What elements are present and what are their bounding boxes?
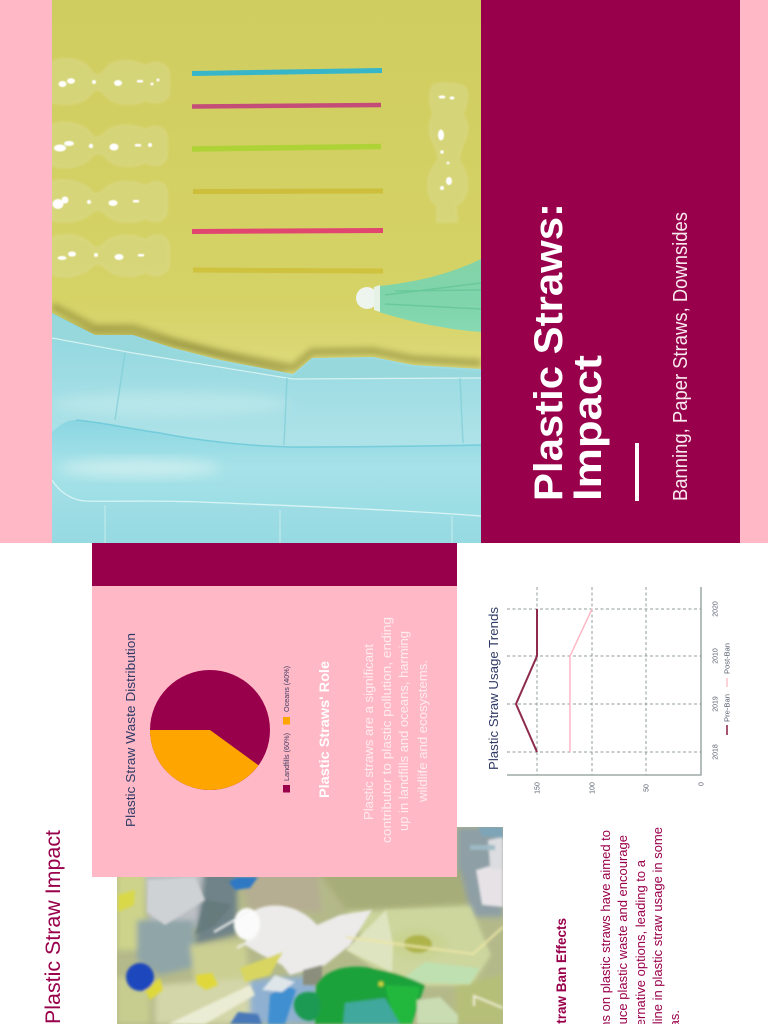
section body text: Plastic straws are a significant: [362, 643, 376, 820]
pie chart title: Plastic Straw Waste Distribution: [123, 633, 138, 827]
straws: [192, 70, 383, 271]
bottles row: [52, 59, 467, 277]
subtitle: Banning, Paper Straws, Downsides: [670, 212, 692, 501]
line chart: plastic straw usage trends: [487, 587, 732, 794]
chart title: Plastic Straw Usage Trends: [487, 607, 501, 770]
section body text: straw ban effects: [598, 827, 682, 1024]
heading: Plastic Straws:: [527, 203, 571, 501]
inflatable upper tube: [52, 313, 481, 543]
heading: Impact: [566, 355, 610, 501]
mint umbrella: [356, 259, 481, 332]
chart legend: Pre-Ban: [724, 694, 732, 722]
heading: [527, 203, 610, 501]
section body text: contributor to plastic pollution, ending: [380, 617, 394, 843]
page heading: plastic straw impact: Plastic Straw Impact: [42, 830, 65, 1024]
year axis labels: 2019: [712, 696, 720, 712]
accent line: [635, 443, 639, 501]
value axis labels: 150: [534, 782, 542, 794]
main translucent bag: [346, 908, 490, 985]
value axis labels: [534, 782, 706, 794]
value axis labels: 0: [698, 782, 706, 786]
photo: straws, bottles and inflatable on yellow: [40, 0, 481, 543]
section body text: [362, 617, 430, 843]
panel header bar: [92, 543, 457, 586]
value axis labels: 50: [644, 784, 650, 792]
inflatable lower tube: [52, 420, 481, 458]
panel background: [92, 586, 457, 877]
year axis labels: 2018: [712, 744, 720, 760]
pie legend: Landfills (60%): [284, 733, 291, 781]
yellow film left: [118, 890, 135, 912]
year axis labels: [712, 601, 720, 760]
post-ban line: [570, 609, 592, 752]
pie legend: [283, 666, 291, 792]
pre-ban line: [516, 609, 537, 752]
year axis labels: 2020: [712, 601, 720, 617]
section body text: wildlife and ecosystems.: [416, 660, 430, 803]
pie legend: Oceans (40%): [284, 666, 291, 712]
chart legend: Post-Ban: [724, 643, 732, 674]
photo: plastic waste pile: [117, 827, 503, 1024]
blue cap and neck: [145, 978, 163, 1000]
green bottle: [315, 967, 425, 1024]
pink left edge band: [0, 0, 52, 543]
pink right edge band: [740, 0, 768, 543]
section heading: Plastic Straws' Role: [317, 660, 332, 798]
panel: plastic straws' role: [92, 543, 457, 877]
value axis labels: 100: [590, 782, 596, 794]
section body text: up in landfills and oceans, harming: [397, 631, 411, 831]
pie chart: [150, 670, 270, 790]
white bag and disc: [245, 906, 372, 975]
chart legend: [724, 643, 732, 735]
title panel: [481, 0, 740, 543]
year axis labels: 2010: [712, 648, 720, 664]
